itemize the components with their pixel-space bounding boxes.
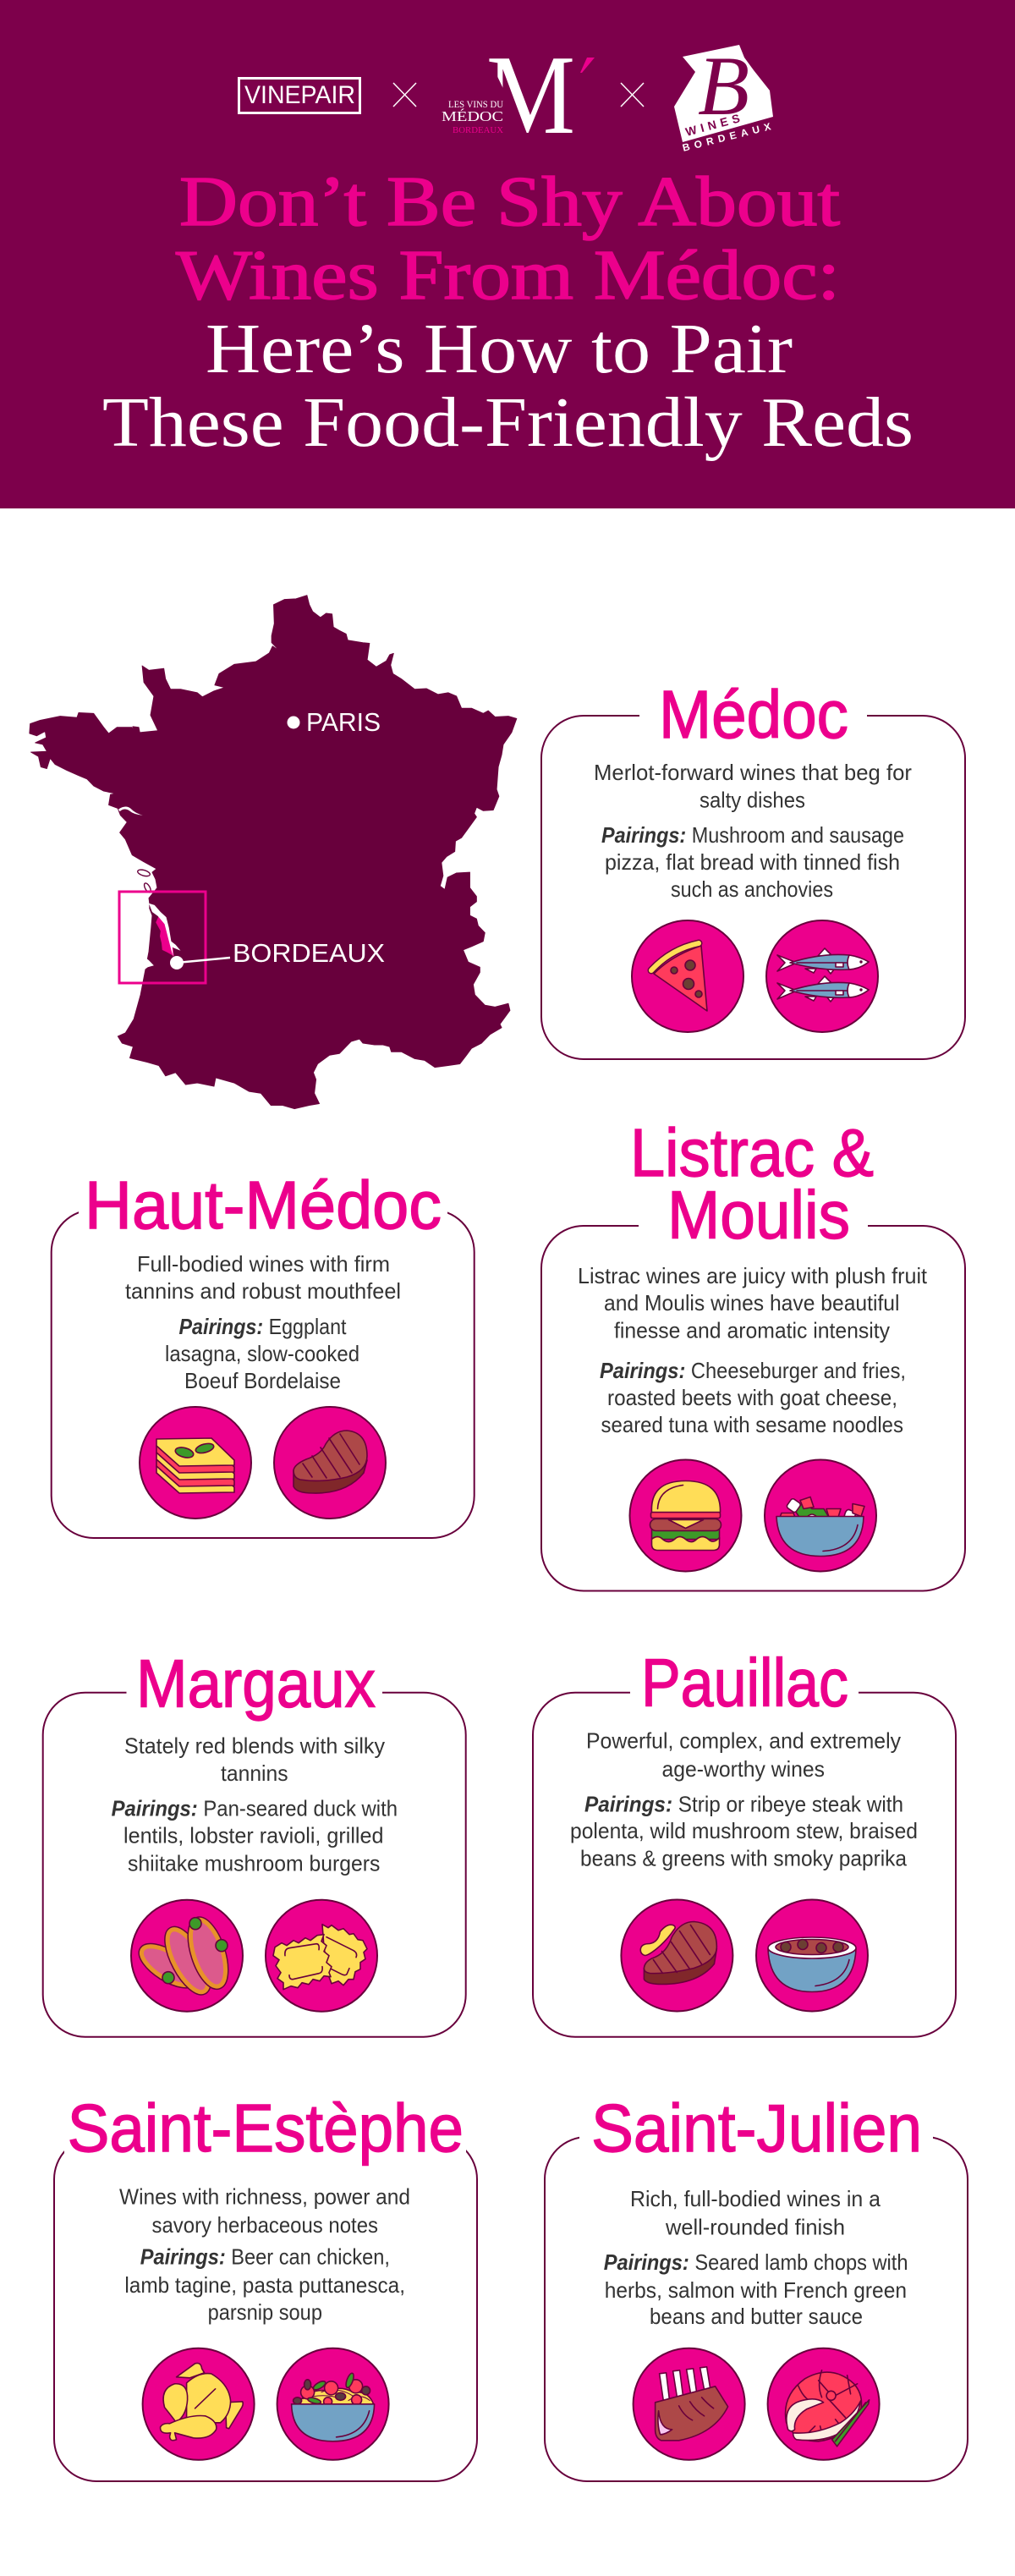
text: Pauillac description: beans & greens with smoky paprika <box>580 1846 907 1871</box>
icon: pizza <box>632 920 743 1032</box>
panel: Listrac & Moulis <box>541 1115 965 1590</box>
heading: Listrac & Moulis: Moulis <box>667 1178 850 1252</box>
text: Pauillac description: age-worthy wines <box>661 1756 825 1782</box>
title: Here’s How to Pair <box>206 310 793 388</box>
text: Listrac & Moulis description: Pairings: Cheeseburger and fries, <box>600 1358 906 1383</box>
icon: roast chicken <box>143 2348 255 2460</box>
icon: lasagna <box>140 1407 251 1519</box>
Paris marker: PARIS <box>306 707 381 737</box>
title: These Food-Friendly Reds <box>102 383 914 462</box>
text: Médoc description: such as anchovies <box>671 876 833 902</box>
text: Médoc description: Pairings: Mushroom and sausage <box>601 822 904 848</box>
text: Margaux description: lentils, lobster ravioli, grilled <box>123 1823 384 1848</box>
text: Margaux description: shiitake mushroom burgers <box>128 1851 380 1876</box>
text: Saint-Estèphe description: lamb tagine, pasta puttanesca, <box>124 2272 405 2298</box>
text: Saint-Estèphe description: Wines with richness, power and <box>119 2184 410 2210</box>
icon: seared duck <box>131 1900 243 2012</box>
text: Haut-Médoc description: Boeuf Bordelaise <box>184 1368 341 1393</box>
icon: lamb chops <box>634 2348 745 2460</box>
text: Saint-Julien description: herbs, salmon with French green <box>605 2277 907 2303</box>
title <box>102 162 914 462</box>
icon: cheeseburger <box>629 1460 741 1572</box>
text: Haut-Médoc description: Full-bodied wines with firm <box>137 1251 390 1277</box>
text: Saint-Julien description: Pairings: Seared lamb chops with <box>604 2249 908 2275</box>
Gironde estuary <box>149 904 181 957</box>
panel: Haut-Médoc <box>52 1167 475 1538</box>
icon: salmon with green beans <box>768 2348 880 2460</box>
text: Saint-Estèphe description: Pairings: Beer can chicken, <box>140 2244 390 2270</box>
panel: Saint-Julien <box>545 2090 968 2481</box>
logo: Bordeaux Wines: B <box>698 39 749 133</box>
text: Haut-Médoc description <box>125 1251 401 1393</box>
text: Margaux description <box>112 1733 398 1876</box>
text: Saint-Estèphe description <box>119 2184 410 2325</box>
logo: Bordeaux Wines: BORDEAUX <box>681 119 776 154</box>
panel: Médoc <box>541 677 965 1059</box>
heading: Haut-Médoc: Haut-Médoc <box>85 1167 442 1243</box>
text: Saint-Julien description: beans and butter sauce <box>650 2304 863 2329</box>
logo: VinePair: VINEPAIR <box>244 81 355 109</box>
text: Listrac & Moulis description: Listrac wines are juicy with plush fruit <box>578 1263 928 1288</box>
icon: ribeye steak with butter <box>621 1900 732 2012</box>
logo: Les Vins du Médoc <box>442 32 595 157</box>
text: Pauillac description: polenta, wild mushroom stew, braised <box>570 1818 918 1843</box>
text: Médoc description <box>594 760 912 902</box>
pink locator box <box>119 892 206 983</box>
text: Médoc description: Merlot-forward wines that beg for <box>594 760 912 785</box>
text: Saint-Julien description: well-rounded finish <box>665 2215 845 2240</box>
icon: anchovies <box>766 920 878 1032</box>
logo: Les Vins du Médoc: MÉDOC <box>442 108 503 124</box>
text: Listrac & Moulis description: seared tuna with sesame noodles <box>601 1412 903 1437</box>
panel: Pauillac <box>533 1645 956 2037</box>
text: Haut-Médoc description: tannins and robust mouthfeel <box>125 1278 401 1304</box>
text: Listrac & Moulis description <box>578 1263 928 1437</box>
text: Médoc description: salty dishes <box>700 787 805 812</box>
icon: steak <box>274 1407 386 1519</box>
text: Margaux description: Stately red blends with silky <box>124 1733 385 1759</box>
heading: Saint-Estèphe: Saint-Estèphe <box>68 2090 464 2166</box>
text: Saint-Julien description <box>604 2186 908 2329</box>
logo: Les Vins du Médoc: BORDEAUX <box>453 126 503 135</box>
logo: Les Vins du Médoc: LES VINS DU <box>448 100 504 110</box>
logo: Bordeaux Wines: WINES <box>684 110 745 139</box>
text: Saint-Estèphe description: savory herbaceous notes <box>152 2212 378 2238</box>
text: Pauillac description <box>570 1728 918 1871</box>
icon: pasta puttanesca <box>277 2348 389 2460</box>
Bordeaux marker <box>170 938 385 969</box>
heading: Margaux: Margaux <box>136 1646 376 1722</box>
text: Médoc description: pizza, flat bread with tinned fish <box>605 849 900 875</box>
heading: Médoc: Médoc <box>659 677 848 752</box>
icon: mushroom stew <box>756 1900 868 2012</box>
text: Listrac & Moulis description: and Moulis wines have beautiful <box>604 1290 900 1315</box>
map of France <box>30 596 517 1109</box>
map outline <box>30 596 517 1109</box>
icon: times separator <box>621 83 644 107</box>
text: Margaux description: Pairings: Pan-seared duck with <box>112 1796 398 1821</box>
title: Don’t Be Shy About <box>179 162 840 241</box>
icon: times separator <box>393 83 416 107</box>
text: Haut-Médoc description: Pairings: Eggplant <box>179 1314 347 1339</box>
icon: salad bowl <box>765 1460 876 1572</box>
heading: Listrac & Moulis: Listrac & <box>630 1115 874 1190</box>
icon: ravioli <box>266 1900 377 2012</box>
Médoc region <box>156 914 174 956</box>
panel: Saint-Estèphe <box>54 2090 477 2481</box>
text: Pauillac description: Pairings: Strip or ribeye steak with <box>584 1792 903 1817</box>
heading: Listrac & Moulis <box>630 1115 874 1252</box>
text: Listrac & Moulis description: roasted beets with goat cheese, <box>607 1385 897 1410</box>
text: Haut-Médoc description: lasagna, slow-cooked <box>165 1341 359 1366</box>
heading: Pauillac: Pauillac <box>641 1645 848 1721</box>
panel: Margaux <box>43 1646 466 2037</box>
text: Listrac & Moulis description: finesse and aromatic intensity <box>614 1318 890 1343</box>
text: Saint-Julien description: Rich, full-bodied wines in a <box>630 2186 881 2211</box>
title: Wines From Médoc: <box>176 236 840 315</box>
logo: Les Vins du Médoc: M <box>486 32 575 157</box>
text: Margaux description: tannins <box>221 1760 288 1786</box>
header banner <box>0 0 1015 508</box>
text: Saint-Estèphe description: parsnip soup <box>208 2299 322 2325</box>
logo: Bordeaux Wines <box>674 39 776 154</box>
text: Pauillac description: Powerful, complex, and extremely <box>586 1728 901 1754</box>
heading: Saint-Julien: Saint-Julien <box>591 2090 922 2166</box>
Bordeaux marker: BORDEAUX <box>233 938 385 968</box>
